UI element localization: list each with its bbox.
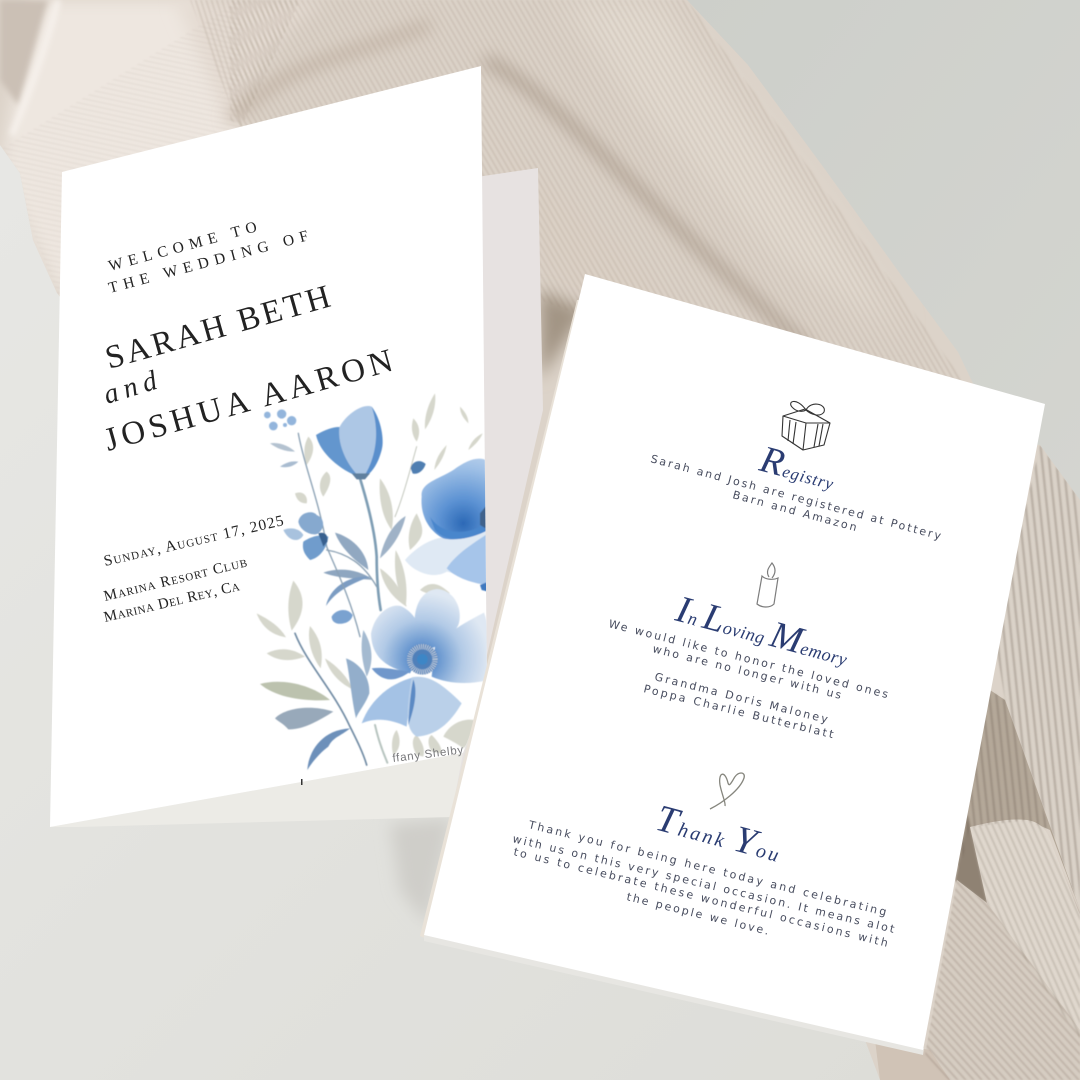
- name: bride: SARAH BETH: [101, 279, 334, 377]
- forget-me-not sprig: [264, 409, 298, 467]
- heading: Registry: Registry: [755, 438, 840, 498]
- card thickness at bottom: [424, 935, 924, 1055]
- front cover: [50, 66, 487, 827]
- fabric: shaded panel behind bulge: [958, 690, 1078, 904]
- poppy at right edge: [405, 459, 488, 592]
- welcome line: WELCOME TO: [107, 219, 259, 275]
- stems: [295, 433, 417, 765]
- fabric: upper right drape: [995, 445, 1080, 910]
- printed credit at fold: ffany Shelby: [392, 744, 464, 765]
- lower page edge: [50, 753, 463, 827]
- connector and: and: [100, 365, 162, 411]
- icon: gift box: [782, 401, 830, 450]
- panel: left folded program: [50, 66, 543, 827]
- thank you text: with us on this very special occasion. It means alot: [511, 832, 896, 936]
- registry text: Sarah and Josh are registered at Pottery: [649, 452, 943, 543]
- fabric: crease upper centre: [230, 25, 430, 120]
- icon: heart: [710, 773, 744, 809]
- fabric: pale fold at upper left: [0, 0, 260, 300]
- thank you text: to us to celebrate these wonderful occasions with: [512, 845, 889, 950]
- fabric: mid fold: [480, 120, 730, 350]
- fabric: bright ridge: [630, 28, 807, 243]
- name: groom: JOSHUA AARON: [100, 343, 397, 459]
- fabric: shadow by inner page: [540, 286, 578, 378]
- blue leaf bottom: [307, 728, 350, 770]
- fabric: warm ribbed fold upper centre: [185, 6, 295, 96]
- registry text: Barn and Amazon: [731, 488, 858, 534]
- venue line 1: Marina Resort Club: [102, 555, 249, 605]
- small fold mark: [301, 779, 302, 785]
- fabric: pink strip at bottom: [876, 1044, 950, 1080]
- background: grey wall upper right: [680, 0, 1080, 520]
- heading: Thank You: Thank You: [652, 797, 785, 871]
- blue leaves by stem: [323, 516, 406, 718]
- date: Sunday, August 17, 2025: [102, 512, 285, 570]
- memory text: We would like to honor the loved ones: [607, 617, 890, 701]
- fabric: lower band: [956, 880, 1080, 1040]
- tulip bloom: [316, 406, 383, 479]
- fabric: shaded corner upper left: [0, 0, 48, 105]
- card under page at left: [420, 300, 580, 940]
- panel: right reception card: [420, 274, 1045, 1055]
- pale background leaves: [257, 393, 483, 757]
- cover text block: [100, 219, 397, 626]
- wedding line: THE WEDDING OF: [107, 227, 310, 297]
- venue line 2: Marina Del Rey, Ca: [102, 578, 241, 626]
- fabric: crease down from inner page: [485, 60, 810, 350]
- memory text: Poppa Charlie Butterblatt: [642, 682, 835, 741]
- sage leaf: [260, 682, 330, 700]
- fabric: bulge fold: [970, 820, 1080, 916]
- blue grey leaf: [275, 708, 333, 729]
- shadow on table under folded card: [390, 818, 452, 925]
- watercolor floral illustration: [257, 393, 489, 770]
- small blue blossoms: [283, 461, 426, 624]
- fabric: bright fold line upper left: [12, 0, 58, 135]
- memory text: who are no longer with us: [651, 642, 843, 702]
- section: in loving memory: [607, 563, 890, 741]
- memory text: Grandma Doris Maloney: [653, 670, 830, 726]
- thank you text: the people we love.: [625, 890, 770, 938]
- fabric: dark recess right of bulge: [1068, 886, 1080, 914]
- large poppy bloom: [362, 589, 489, 737]
- fabric: dark recess by card: [955, 815, 988, 905]
- memory text: [607, 617, 890, 741]
- inner back page: [430, 168, 543, 817]
- thank you text: Thank you for being here today and celebrating: [526, 818, 888, 919]
- card face: [424, 274, 1045, 1050]
- section: registry: [649, 401, 943, 543]
- section: thank you: [511, 773, 896, 950]
- heading: In Loving Memory: In Loving Memory: [671, 588, 854, 675]
- icon: candle: [757, 563, 778, 607]
